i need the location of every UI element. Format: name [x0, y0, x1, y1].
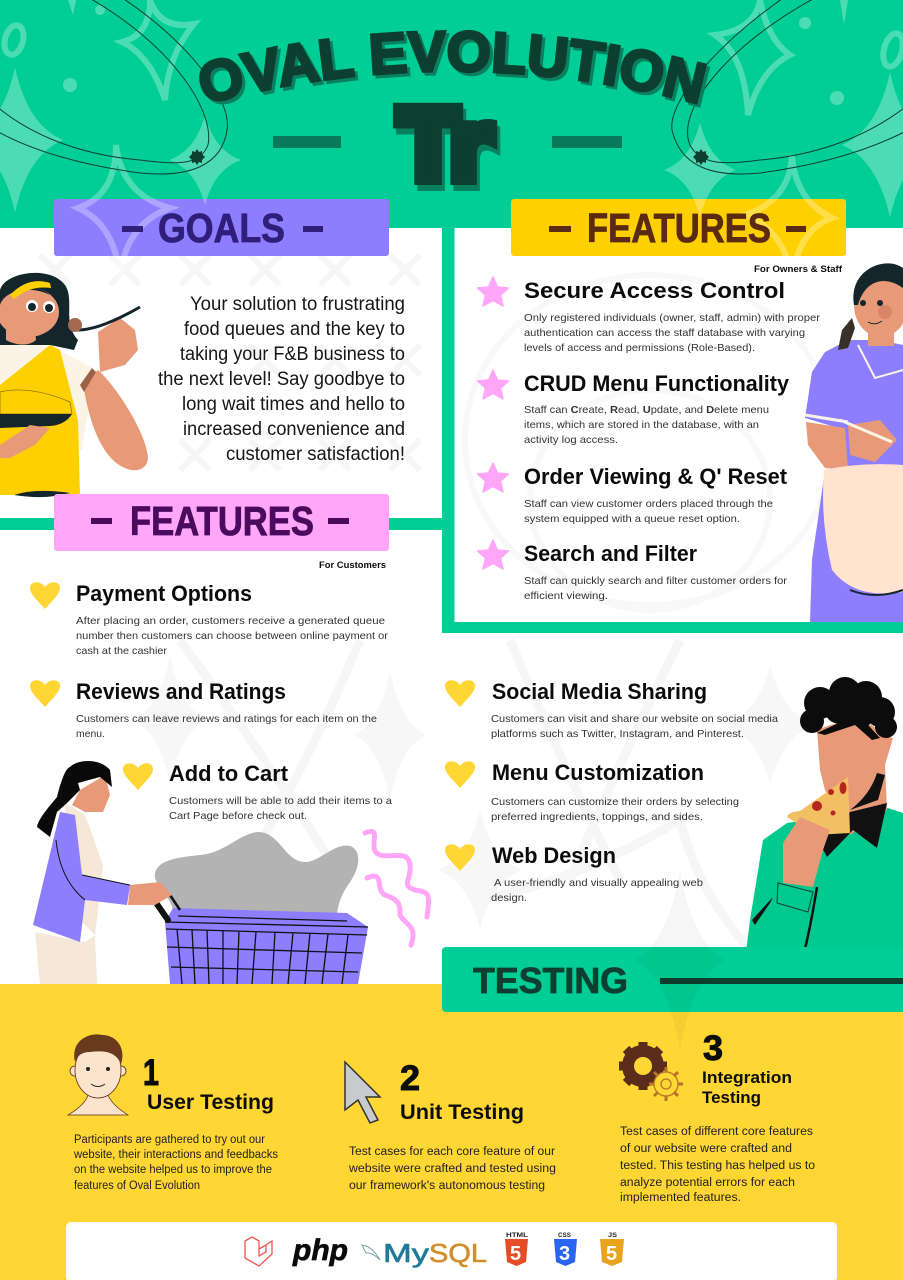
feature: reviews and ratings — [76, 679, 377, 740]
illustration: woman tasting food — [0, 273, 148, 497]
feature: CRUD: Staff can Create, Read, Update, and Delete menu — [524, 404, 769, 416]
text: goals paragraph: long wait times and hello to — [182, 394, 405, 415]
step 3: integration testing: analyze potential errors for each — [620, 1177, 795, 1189]
banner: features for customers: FEATURES — [130, 498, 314, 544]
feature: secure access control — [524, 278, 821, 354]
step 2: unit testing — [348, 1059, 556, 1192]
logo: mysql — [362, 1238, 487, 1268]
banner shape: goals — [54, 199, 389, 256]
feature: social media sharing — [491, 679, 778, 740]
feature: menu customization: Menu Customization — [492, 760, 704, 785]
step 2: unit testing: Test cases for each core feature of our — [349, 1146, 555, 1158]
feature: search and filter: Staff can quickly search and filter customer orders for — [524, 575, 788, 587]
illustration: man eating pizza — [745, 677, 903, 960]
feature: reviews and ratings: menu. — [76, 728, 105, 740]
logo: laravel — [245, 1237, 272, 1266]
header dashes — [273, 136, 622, 148]
feature: secure access control: levels of access and permissions (Role-Based). — [524, 342, 755, 354]
illustration: pink squiggles — [365, 831, 429, 945]
feature: CRUD — [524, 371, 790, 446]
banner: testing — [442, 947, 903, 1012]
step 1: user testing: on the website helped us to improve the — [74, 1164, 272, 1176]
step 1: user testing: Participants are gathered to try out our — [74, 1134, 265, 1146]
step 3: integration testing: tested. This testing has helped us to — [620, 1160, 815, 1172]
feature: search and filter: Search and Filter — [524, 541, 697, 566]
label: for owners and staff: For Owners & Staff — [754, 264, 843, 275]
label: for customers: For Customers — [319, 560, 386, 571]
logo: css3 — [554, 1232, 577, 1266]
background: faint stars on white — [134, 655, 815, 930]
text: goals paragraph: Your solution to frustrating — [190, 294, 405, 315]
green frame between panels — [0, 228, 903, 633]
feature: order viewing: system equipped with a queue reset option. — [524, 513, 740, 525]
feature: add to cart: Add to Cart — [169, 761, 289, 786]
feature: add to cart: Customers will be able to add their items to a — [169, 795, 392, 807]
feature: web design: Web Design — [492, 843, 616, 868]
logo: mysql: SQL — [429, 1238, 487, 1268]
feature: web design: A user-friendly and visually appealing web — [494, 877, 703, 889]
step 3: integration testing: of our website were crafted and — [620, 1143, 792, 1155]
feature: secure access control: authentication can access the staff database with varying — [524, 327, 805, 339]
feature: menu customization: Customers can customize their orders by selecting — [491, 796, 739, 808]
section: testing yellow band — [0, 984, 903, 1280]
text: goals paragraph: customer satisfaction! — [226, 444, 405, 465]
background: faint star over testing band — [635, 870, 725, 1050]
feature: social media sharing: platforms such as Twitter, Instagram, and Pinterest. — [491, 728, 744, 740]
logo: html5: 5 — [510, 1243, 521, 1265]
icons: yellow hearts — [30, 582, 475, 871]
feature: payment options: Payment Options — [76, 581, 252, 606]
banner: testing: TESTING — [473, 960, 628, 1001]
background: faint white-area decoration — [40, 255, 835, 960]
title: Oval Evolution curved: OVAL EVOLUTION — [208, 33, 710, 108]
logo: css3: CSS — [558, 1232, 572, 1239]
step 1: user testing: User Testing — [147, 1091, 274, 1114]
text: goals paragraph — [158, 294, 405, 465]
logo: javascript — [600, 1232, 624, 1266]
feature: payment options: number then customers can choose between online payment or — [76, 630, 389, 642]
header decoration: translucent stars and dots — [0, 0, 903, 280]
step 3: integration testing — [620, 1029, 815, 1204]
feature: CRUD: activity log access. — [524, 434, 618, 446]
feature: social media sharing: Social Media Sharing — [492, 679, 707, 704]
banner shape: features for owners — [511, 199, 846, 256]
header decoration: thin swoosh lines with dots — [0, 0, 903, 174]
step 3: integration testing: 3 — [703, 1029, 723, 1068]
step 2: unit testing: Unit Testing — [400, 1101, 524, 1124]
title: Oval Evolution curved: OVAL EVOLUTION — [199, 30, 707, 105]
feature: menu customization: preferred ingredients, toppings, and sides. — [491, 811, 703, 823]
text: goals paragraph: the next level! Say goodbye to — [158, 369, 405, 390]
step 3: integration testing: Testing — [702, 1088, 761, 1107]
banner: features for customers — [54, 494, 389, 551]
step 3: integration testing: Test cases of different core features — [620, 1126, 813, 1138]
feature: order viewing — [524, 464, 788, 525]
step 1: user testing: features of Oval Evolution — [74, 1180, 200, 1192]
feature: order viewing: Staff can view customer orders placed through the — [524, 498, 773, 510]
feature: menu customization — [491, 760, 739, 823]
text: goals paragraph: taking your F&B business to — [180, 344, 405, 365]
logo: html5: HTML — [506, 1232, 528, 1239]
feature: CRUD: CRUD Menu Functionality — [524, 371, 790, 396]
feature: reviews and ratings: Customers can leave reviews and ratings for each item on the — [76, 713, 377, 725]
icons: pink stars — [478, 277, 508, 569]
logo: mysql: My — [383, 1238, 429, 1268]
feature: add to cart: Cart Page before check out. — [169, 810, 307, 822]
logo: Tr monogram: Tr — [401, 96, 496, 208]
feature: web design — [491, 843, 703, 904]
step 1: user testing: website, their interactions and feedbacks — [73, 1149, 278, 1161]
step 3: integration testing: Integration — [702, 1068, 792, 1087]
logo: Tr monogram: Tr — [398, 90, 493, 202]
illustration: waitress — [805, 263, 903, 622]
feature: web design: design. — [491, 892, 527, 904]
logo: javascript: JS — [608, 1232, 618, 1239]
logo: php: php — [292, 1234, 348, 1267]
feature: payment options: cash at the cashier — [76, 645, 168, 657]
feature: order viewing: Order Viewing & Q' Reset — [524, 464, 788, 489]
feature: secure access control: Only registered individuals (owner, staff, admin) with proper — [524, 312, 821, 324]
feature: add to cart — [169, 761, 392, 822]
heading: features for owners: FEATURES — [587, 205, 771, 251]
list: customer features — [76, 581, 778, 904]
illustration: shopping cart — [152, 895, 368, 984]
feature: payment options — [76, 581, 389, 657]
icon: gears — [619, 1042, 683, 1101]
feature: search and filter: efficient viewing. — [524, 590, 608, 602]
step 2: unit testing: our framework's autonomous testing — [349, 1180, 545, 1192]
illustration: woman with cart — [33, 761, 172, 984]
step 2: unit testing: 2 — [400, 1059, 420, 1098]
icon: user face — [68, 1034, 128, 1115]
feature: social media sharing: Customers can visit and share our website on social media — [491, 713, 778, 725]
step 2: unit testing: website were crafted and tested using — [348, 1163, 556, 1175]
header: green band — [0, 0, 903, 228]
logo: html5 — [505, 1232, 528, 1266]
list: owner features — [524, 278, 821, 602]
icon: mouse cursor — [345, 1062, 380, 1123]
panel: technology logos — [66, 1222, 837, 1280]
feature: reviews and ratings: Reviews and Ratings — [76, 679, 286, 704]
text: goals paragraph: increased convenience and — [183, 419, 405, 440]
text: goals paragraph: food queues and the key to — [184, 319, 405, 340]
feature: secure access control: Secure Access Control — [524, 278, 785, 303]
step 1: user testing: 1 — [143, 1052, 159, 1093]
feature: payment options: After placing an order, customers receive a generated queue — [76, 615, 385, 627]
step 1: user testing — [73, 1052, 278, 1192]
heading: goals: GOALS — [158, 205, 285, 251]
logo: css3: 3 — [559, 1243, 570, 1265]
step 3: integration testing: implemented features. — [620, 1192, 741, 1204]
feature: search and filter — [524, 541, 788, 602]
illustration: cart blob — [155, 832, 358, 915]
logo: javascript: 5 — [606, 1243, 617, 1265]
feature: CRUD: items, which are stored in the database, with an — [524, 419, 759, 431]
